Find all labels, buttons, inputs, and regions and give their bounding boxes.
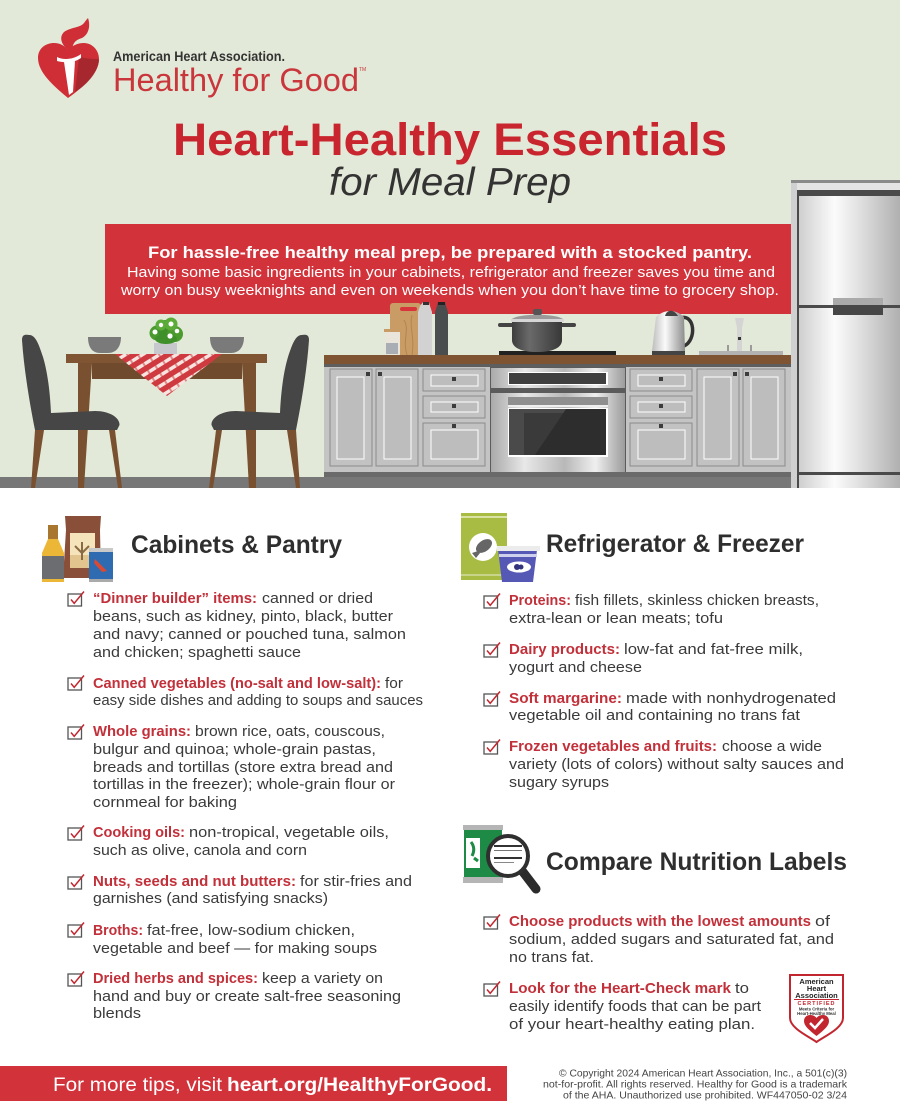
list item: dried herbs and spices bbox=[68, 970, 401, 1022]
logo: American Heart Association Healthy for Good bbox=[38, 18, 285, 98]
background wall bbox=[0, 0, 900, 488]
tablecloth bbox=[115, 354, 222, 396]
list item: broths: fat-free, low-sodium chicken, bbox=[147, 922, 355, 939]
floor bbox=[0, 477, 900, 488]
list item: frozen vegetables and fruits: Frozen vegetables and fruits: bbox=[509, 738, 717, 755]
intro banner: worry on busy weeknights and even on weekends when you don’t have time to grocery shop. bbox=[120, 282, 779, 299]
list item: proteins: Proteins: bbox=[509, 592, 571, 609]
list item: whole grains: breads and tortillas (store extra bread and bbox=[93, 759, 393, 776]
list item: dairy products: yogurt and cheese bbox=[509, 659, 642, 676]
title: for Meal Prep bbox=[329, 161, 571, 204]
oven bbox=[490, 367, 626, 472]
icon: can and magnifying glass bbox=[463, 825, 536, 889]
illustration: kitchen scene bbox=[0, 180, 900, 488]
title: Heart-Healthy Essentials bbox=[173, 114, 727, 165]
list item: canned vegetables: for bbox=[385, 675, 403, 692]
list item: proteins: fish fillets, skinless chicken breasts, bbox=[575, 592, 819, 609]
list item: choose products bbox=[484, 913, 834, 966]
list item: cooking oils: non-tropical, vegetable oils, bbox=[189, 824, 389, 841]
bowl right bbox=[210, 337, 244, 353]
list item: nuts and seeds: garnishes (and satisfying snacks) bbox=[93, 890, 328, 907]
list item: frozen vegetables and fruits: choose a wide bbox=[722, 738, 822, 755]
list item: choose products: sodium, added sugars and saturated fat, and bbox=[509, 931, 834, 948]
heading: Refrigerator & Freezer: Refrigerator & Freezer bbox=[546, 530, 804, 558]
footer call to action bar: heart.org/HealthyForGood. bbox=[227, 1075, 492, 1096]
badge: heart-check certified: Association bbox=[795, 991, 838, 1000]
list item: broths: vegetable and beef — for making soups bbox=[93, 940, 377, 957]
list item: broths: Broths: bbox=[93, 922, 143, 939]
list item: heart-check mark: of your heart-healthy eating plan. bbox=[509, 1016, 755, 1033]
list item: heart-check mark: Look for the Heart-Check mark bbox=[509, 980, 732, 997]
list item: dinner builder: and navy; canned or pouched tuna, salmon bbox=[93, 626, 406, 643]
list item: dinner builder bbox=[68, 590, 406, 661]
list item: soft margarine bbox=[484, 690, 836, 724]
list item: dinner builder: beans, such as kidney, pinto, black, butter bbox=[93, 608, 393, 625]
countertop and cabinets bbox=[324, 355, 791, 477]
list item: proteins bbox=[484, 592, 819, 627]
list item: whole grains: bulgur and quinoa; whole-grain pastas, bbox=[93, 741, 376, 758]
wordmark: Healthy for Good: Healthy for Good bbox=[113, 62, 359, 98]
list item: dried herbs and spices: blends bbox=[93, 1005, 141, 1022]
footer call to action bar: For more tips, visit bbox=[53, 1075, 223, 1096]
list item: whole grains: tortillas in the freezer); whole-grain flour or bbox=[93, 776, 395, 793]
list item: dinner builder: canned or dried bbox=[262, 590, 373, 607]
list item: nuts and seeds: Nuts, seeds and nut butters: bbox=[93, 873, 296, 890]
list item: dairy products: low-fat and fat-free milk, bbox=[624, 641, 803, 658]
wordmark: American Heart Association: American Heart Association. bbox=[113, 48, 285, 64]
list item: canned vegetables: Canned vegetables (no-salt and low-salt): bbox=[93, 675, 381, 692]
sink faucet bbox=[699, 318, 783, 355]
icon: heart and torch bbox=[38, 18, 99, 98]
badge: heart-check certified: Heart-Healthy Meal bbox=[797, 1011, 836, 1016]
copyright notice: not-for-profit. All rights reserved. Healthy for Good is a trademark bbox=[543, 1078, 848, 1090]
wordmark: Healthy for Good: TM bbox=[359, 67, 366, 73]
list item: dinner builder: and chicken; spaghetti sauce bbox=[93, 644, 301, 661]
intro banner: Having some basic ingredients in your cabinets, refrigerator and freezer saves you time and bbox=[127, 264, 775, 281]
copyright notice bbox=[543, 1068, 848, 1102]
intro banner bbox=[105, 224, 791, 314]
footer call to action bar bbox=[0, 1066, 507, 1101]
heading: Compare Nutrition Labels: Compare Nutrition Labels bbox=[546, 848, 847, 876]
list item: frozen vegetables and fruits: sugary syrups bbox=[509, 774, 609, 791]
list item: dried herbs and spices: keep a variety on bbox=[262, 970, 383, 987]
list item: dinner builder: “Dinner builder” items: bbox=[93, 590, 257, 607]
badge: heart-check certified: American bbox=[799, 977, 834, 986]
list item: frozen vegetables and fruits bbox=[484, 738, 844, 791]
title bbox=[173, 114, 727, 204]
list item: canned vegetables: easy side dishes and adding to soups and sauces bbox=[93, 692, 423, 709]
badge: heart-check certified: Meets Criteria for bbox=[799, 1006, 834, 1012]
list item: nuts and seeds: for stir-fries and bbox=[300, 873, 412, 890]
list item: heart-check mark bbox=[484, 980, 762, 1033]
badge: heart-check certified: CERTIFIED bbox=[797, 1001, 836, 1007]
bowl left bbox=[88, 337, 121, 353]
chair left bbox=[22, 335, 122, 488]
list item: broths bbox=[68, 922, 377, 957]
panel: cabinets and pantry bbox=[42, 516, 423, 1022]
kettle bbox=[652, 311, 693, 355]
list item: whole grains: brown rice, oats, couscous, bbox=[195, 723, 385, 740]
list item: soft margarine: vegetable oil and containing no trans fat bbox=[509, 707, 801, 724]
copyright notice: of the AHA. Unauthorized use prohibited. WF447050-02 3/24 bbox=[563, 1090, 847, 1102]
icon: frozen bag and yogurt tub bbox=[461, 513, 540, 582]
copyright notice: © Copyright 2024 American Heart Association, Inc., a 501(c)(3) bbox=[559, 1068, 847, 1080]
cutting board and bottles bbox=[384, 302, 448, 355]
list item: dried herbs and spices: Dried herbs and spices: bbox=[93, 970, 258, 987]
plant in pot bbox=[150, 318, 183, 354]
list item: whole grains: Whole grains: bbox=[93, 723, 191, 740]
list item: choose products: Choose products with the lowest amounts bbox=[509, 913, 811, 930]
intro banner: For hassle-free healthy meal prep, be prepared with a stocked pantry. bbox=[148, 243, 752, 262]
list item: nuts and seeds bbox=[68, 873, 412, 907]
heading: Cabinets & Pantry: Cabinets & Pantry bbox=[131, 531, 342, 559]
list item: dairy products: Dairy products: bbox=[509, 641, 620, 658]
refrigerator bbox=[791, 180, 900, 488]
panel: refrigerator and freezer bbox=[461, 513, 844, 791]
badge: heart-check certified bbox=[790, 975, 843, 1042]
list item: cooking oils bbox=[68, 824, 389, 859]
list item: cooking oils: such as olive, canola and corn bbox=[93, 842, 307, 859]
list item: heart-check mark: to bbox=[735, 980, 749, 997]
list item: whole grains: cornmeal for baking bbox=[93, 794, 237, 811]
list item: soft margarine: Soft margarine: bbox=[509, 690, 622, 707]
panel: compare nutrition labels bbox=[463, 825, 847, 1042]
list item: canned vegetables bbox=[68, 675, 423, 709]
badge: heart-check certified: Heart bbox=[807, 984, 827, 993]
list item: frozen vegetables and fruits: variety (lots of colors) without salty sauces and bbox=[509, 756, 844, 773]
list item: cooking oils: Cooking oils: bbox=[93, 824, 185, 841]
cooktop and pot bbox=[498, 309, 616, 355]
list item: dried herbs and spices: hand and buy or create salt-free seasoning bbox=[93, 988, 401, 1005]
icon: pantry items bbox=[42, 516, 113, 582]
list item: dairy products bbox=[484, 641, 803, 676]
list item: choose products: no trans fat. bbox=[509, 949, 594, 966]
list item: whole grains bbox=[68, 723, 395, 811]
list item: soft margarine: made with nonhydrogenated bbox=[626, 690, 836, 707]
chair right bbox=[209, 335, 309, 488]
list item: choose products: of bbox=[815, 913, 831, 930]
list item: heart-check mark: easily identify foods that can be part bbox=[509, 998, 762, 1015]
dining table bbox=[66, 354, 267, 488]
list item: proteins: extra-lean or lean meats; tofu bbox=[509, 610, 723, 627]
